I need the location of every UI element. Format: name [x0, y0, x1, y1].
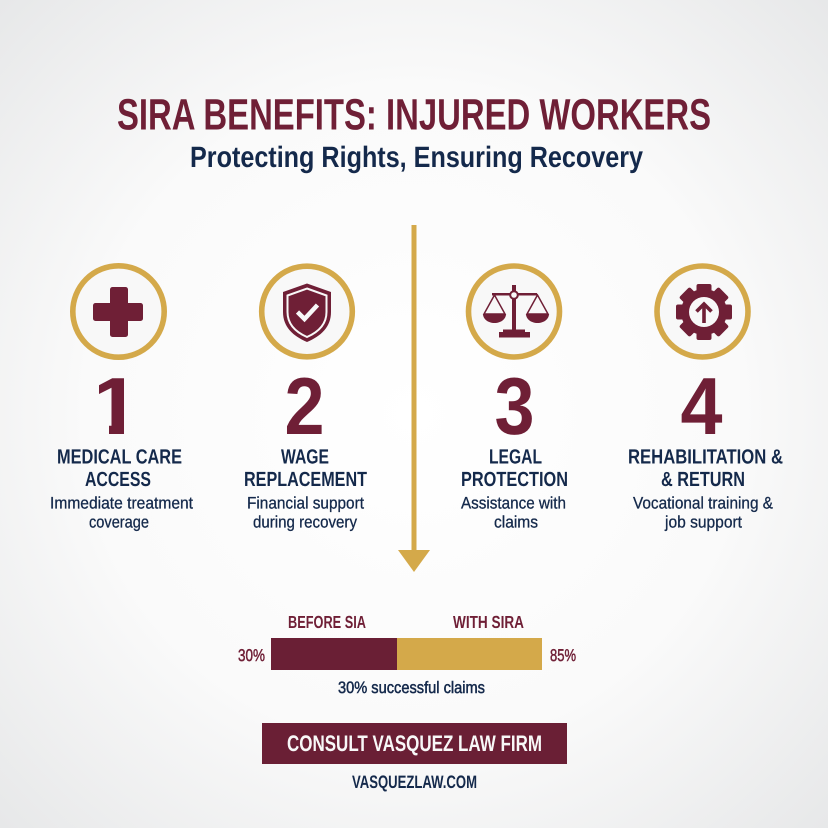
website url: VASQUEZLAW.COM: [352, 772, 477, 792]
bar chart: before and with SIRA: [238, 612, 576, 697]
number 4: 4: [680, 362, 722, 452]
heading: wage replacement: REPLACEMENT: [244, 468, 367, 491]
heading: wage replacement: WAGE: [281, 446, 329, 468]
heading: medical care access: [57, 446, 182, 491]
number 2: 2: [284, 362, 324, 452]
call to action button: [262, 723, 567, 764]
heading: medical care access: MEDICAL CARE: [57, 446, 182, 468]
icon: medical cross: [73, 266, 164, 357]
text: rehabilitation description: job support: [664, 512, 742, 532]
caption: successful claims: 30% successful claims: [338, 679, 485, 697]
text: legal protection description: Assistance with: [461, 494, 566, 512]
icon: scales of justice: [468, 266, 560, 357]
text: rehabilitation description: [633, 494, 773, 532]
call to action button: CONSULT VASQUEZ LAW FIRM: [287, 731, 542, 756]
column 2: wage replacement: [244, 266, 367, 532]
heading: rehabilitation and return: & RETURN: [661, 468, 745, 491]
column 4: rehabilitation and return: [628, 266, 783, 532]
text: medical care description: [50, 494, 193, 532]
heading: wage replacement: [244, 446, 367, 491]
text: medical care description: coverage: [89, 512, 149, 532]
heading: legal protection: PROTECTION: [461, 468, 568, 491]
heading: legal protection: LEGAL: [489, 446, 542, 468]
column 3: legal protection: [461, 266, 568, 532]
value: 30%: 30%: [238, 646, 265, 665]
text: wage replacement description: Financial support: [247, 494, 364, 512]
text: wage replacement description: during recovery: [253, 512, 358, 532]
text: medical care description: Immediate treatment: [50, 494, 193, 512]
icon: gear with up arrow: [657, 266, 748, 357]
column 1: medical care: [50, 266, 193, 532]
number 3: 3: [494, 362, 534, 452]
heading: medical care access: ACCESS: [85, 468, 151, 491]
label: before SIA: BEFORE SIA: [288, 612, 366, 632]
heading: rehabilitation and return: REHABILITATION &: [628, 446, 783, 468]
text: legal protection description: claims: [494, 512, 538, 532]
number 1: 1: [88, 362, 144, 452]
text: wage replacement description: [247, 494, 364, 532]
value: 85%: 85%: [550, 646, 576, 665]
icon: shield with check: [262, 266, 352, 357]
heading: legal protection: [461, 446, 568, 491]
subtitle: Protecting Rights, Ensuring Recovery: [190, 141, 643, 174]
text: legal protection description: [461, 494, 566, 532]
bar segment: with: [397, 638, 542, 670]
text: rehabilitation description: Vocational training &: [633, 494, 773, 512]
arrow: central downward timeline: [398, 225, 430, 572]
label: with SIRA: WITH SIRA: [453, 612, 524, 632]
bar segment: before: [271, 638, 397, 670]
heading: rehabilitation and return: [628, 446, 783, 491]
